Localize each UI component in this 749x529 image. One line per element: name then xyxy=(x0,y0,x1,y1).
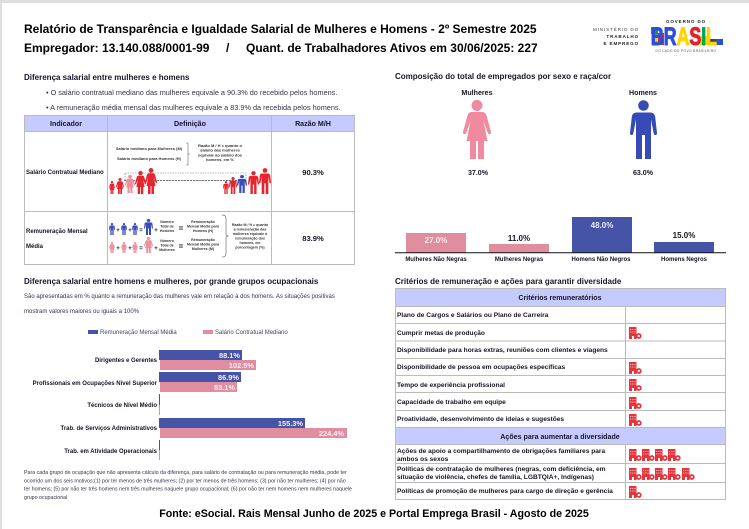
bullet text: • O salário contratual mediano das mulheres equivale a 90.3% do recebido pelos homens. xyxy=(46,88,337,97)
group: dirigentes e gerentes: Dirigentes e Gerentes xyxy=(95,358,158,364)
pictogram: homens: 63.0% xyxy=(633,169,654,177)
row: tempo de experiência: Tempo de experiência profissional xyxy=(397,382,505,389)
group: técnicos: Técnicos de Nível Médio xyxy=(87,403,157,409)
group: dirigentes e gerentes xyxy=(95,350,256,370)
footnote: Para cada grupo de ocupação que não apresenta cálculo da diferença, para salário de contratação ou para remuneração média, pode ter xyxy=(24,470,347,476)
pictogram: homens xyxy=(629,89,657,177)
diagram: remuneração média: Mensal Média para xyxy=(187,242,220,246)
footnote: ocorrido um dos seis motivos:(1) por ter menos de três mulheres; (2) por ter menos de três homens; (3) por não ter mulheres; (4) por não xyxy=(24,478,346,484)
pictogram: homens: Homens xyxy=(629,89,657,97)
column: mulheres não negras: Mulheres Não Negras xyxy=(405,257,467,263)
diagram: remuneração média: Mensal Média para xyxy=(187,224,220,228)
column: mulheres negras: 11.0% xyxy=(508,234,530,243)
column: homens não negros xyxy=(571,217,632,263)
column: mulheres não negras: 27.0% xyxy=(425,236,447,245)
group: atividade operacionais: Trab. em Atividade Operacionais xyxy=(64,449,158,455)
column chart: raça/cor xyxy=(395,217,726,263)
row: remuneração mensal média: Remuneração Mensal xyxy=(26,229,88,235)
group: serviços administrativos: 155.3% xyxy=(278,419,303,428)
title xyxy=(24,22,538,55)
diagram: remuneração média: Remuneração xyxy=(191,220,216,224)
group: atividade operacionais xyxy=(64,440,160,460)
group: profissionais: 86.9% xyxy=(218,373,239,382)
title: Quant. de Trabalhadores Ativos em 30/06/2025: 227 xyxy=(246,41,538,55)
row: proatividade: Proatividade, desenvolvimento de ideias e sugestões xyxy=(397,416,564,423)
diagram: remuneração média: Homens (H) xyxy=(193,229,214,233)
row: salário contratual mediano xyxy=(26,143,324,194)
row: ocupações específicas xyxy=(397,362,641,374)
diagram: salário mediano: Salário mediano para Homens (H) xyxy=(117,156,182,161)
logo: governo do brasil: GOVERNO DO xyxy=(666,19,706,24)
header: ações xyxy=(396,428,726,444)
table: indicadores xyxy=(24,116,354,264)
diagram: remuneração média: + xyxy=(128,228,132,234)
logo: governo do brasil: BRASIL xyxy=(651,23,717,51)
diagram: remuneração média: + xyxy=(116,246,120,252)
diagram: remuneração média: Total de xyxy=(160,244,174,248)
row: metas de produção xyxy=(397,327,641,339)
diagram: salário mediano: equivale ao salário dos xyxy=(198,152,243,157)
row: metas de produção: Cumprir metas de produção xyxy=(397,330,485,337)
diagram: remuneração média: a remuneração das xyxy=(234,228,266,232)
column: homens não negros: Homens Não Negros xyxy=(571,257,631,263)
row: plano de cargos: Plano de Cargos e Salários ou Plano de Carreira xyxy=(397,312,549,319)
logo: ministério: MINISTÉRIO DO xyxy=(593,26,639,32)
diagram: remuneração média: = xyxy=(179,224,184,233)
group: dirigentes e gerentes: 102.5% xyxy=(229,361,254,370)
diagram: remuneração média: Homens xyxy=(160,229,174,233)
row: políticas de promoção: Políticas de promoção de mulheres para cargo de direção e gerência xyxy=(397,488,613,495)
diagram: salário mediano: Razão M / H = quanto o xyxy=(198,143,243,148)
heading: critérios: Critérios de remuneração e ações para garantir diversidade xyxy=(395,277,622,286)
diagram: remuneração média: Número xyxy=(160,239,175,243)
heading: diferença salarial: Diferença salarial entre mulheres e homens xyxy=(24,73,190,82)
row: remuneração mensal média: Média xyxy=(26,244,44,250)
legend: Salário Contratual Mediano xyxy=(215,330,288,336)
footnote: ter homens; (5) por não ter três homens nem três mulheres naquele grupo ocupacional; (6) por não ter nem homens nem mulheres naquele xyxy=(24,486,352,492)
diagram: remuneração média: Mulheres xyxy=(159,248,175,252)
row: ocupações específicas: Disponibilidade de pessoa em ocupações específicas xyxy=(397,364,566,371)
diagram: salário mediano xyxy=(109,143,271,194)
title: / xyxy=(226,41,230,55)
diagram: salário mediano: Salário mediano para Mulheres (M) xyxy=(116,146,183,151)
diagram: remuneração média: Razão M / H = quanto xyxy=(232,223,269,227)
column: homens negros: Homens Negros xyxy=(661,257,708,263)
pictogram: mulheres: 37.0% xyxy=(468,169,489,177)
row: salário contratual mediano: 90.3% xyxy=(302,168,324,177)
column: homens não negros: 48.0% xyxy=(591,221,613,230)
diagram: remuneração média: + xyxy=(154,246,158,252)
row: salário contratual mediano: Salário Contratual Mediano xyxy=(26,170,104,176)
logo: governo do brasil: DO LADO DO POVO BRASILEIRO xyxy=(656,49,717,53)
diagram: salário mediano: salário das mulheres xyxy=(200,148,241,153)
logo: ministério: TRABALHO xyxy=(606,34,639,39)
header: critérios remuneratórios: Critérios remuneratórios xyxy=(518,294,602,302)
table: critérios e ações xyxy=(396,288,726,500)
row: horas extras: Disponibilidade para horas extras, reuniões com clientes e viagens xyxy=(397,347,608,354)
diagram: remuneração média: = xyxy=(139,246,143,252)
row: políticas de contratação: Políticas de contratação de mulheres (negras, com deficiência, em xyxy=(397,466,606,473)
row: trabalho em equipe xyxy=(397,397,641,409)
logo: ministério: E EMPREGO xyxy=(604,41,639,46)
column: homens negros: 15.0% xyxy=(673,231,695,240)
chart subtitle: mostram valores maiores ou iguais a 100% xyxy=(24,309,140,315)
heading: composição: Composição do total de empregados por sexo e raça/cor xyxy=(395,72,611,81)
row: tempo de experiência xyxy=(397,379,641,391)
column: homens negros xyxy=(654,231,714,263)
group: serviços administrativos xyxy=(61,418,347,438)
diagram: remuneração média: + xyxy=(116,228,120,234)
header: ações: Ações para aumentar a diversidade xyxy=(500,433,620,441)
diagram: remuneração média: Número xyxy=(160,220,175,224)
bullet text xyxy=(46,88,341,112)
column: mulheres negras: Mulheres Negras xyxy=(495,257,544,263)
column: mulheres negras xyxy=(489,234,549,263)
row: proatividade xyxy=(397,414,641,426)
diagram: salário mediano: homens, em % xyxy=(206,157,234,162)
legend: Remuneração Mensal Média xyxy=(100,330,177,336)
footnote: grupo ocupacional xyxy=(24,495,67,501)
footnote xyxy=(24,470,352,501)
chart subtitle: São apresentadas em % quanto a remuneração das mulheres vale em relação à dos homens. As situações positivas xyxy=(24,294,335,300)
table header: Indicador xyxy=(50,120,82,128)
source: Fonte: eSocial. Rais Mensal Junho de 2025 e Portal Emprega Brasil - Agosto de 2025 xyxy=(159,508,589,520)
table header: Razão M/H xyxy=(295,120,331,128)
group: profissionais: 83.1% xyxy=(214,383,235,392)
title: Empregador: 13.140.088/0001-99 xyxy=(24,41,210,55)
table header xyxy=(24,116,354,132)
row: remuneração mensal média: 83.9% xyxy=(302,234,324,243)
diagram: remuneração média xyxy=(109,215,269,257)
group: profissionais xyxy=(33,372,241,392)
row: políticas de contratação: situação de violência, chefes de família, LGBTQIA+, Indígenas) xyxy=(397,474,594,481)
logo: ministério xyxy=(593,26,639,46)
diagram: remuneração média: homens, em xyxy=(240,241,260,245)
row: compartilhamento de obrigações xyxy=(397,448,680,463)
table header: Definição xyxy=(174,120,207,128)
row: compartilhamento de obrigações: ambos os sexos xyxy=(397,456,449,463)
diagram: remuneração média: Remuneração xyxy=(191,238,216,242)
group: serviços administrativos: 224.4% xyxy=(319,429,344,438)
group: serviços administrativos: Trab. de Serviços Administrativos xyxy=(61,426,158,432)
title: Relatório de Transparência e Igualdade Salarial de Mulheres e Homens - 2º Semestre 2025 xyxy=(24,22,537,36)
diagram: remuneração média: Mulheres (M) xyxy=(192,247,215,251)
row: compartilhamento de obrigações: Ações de apoio a compartilhamento de obrigações familiares para xyxy=(397,448,605,455)
diagram: remuneração média: porcentagem (%) xyxy=(235,246,265,250)
row: remuneração mensal média xyxy=(26,215,324,257)
group: profissionais: Profissionais em Ocupações Nível Superior xyxy=(33,381,158,387)
legend xyxy=(88,330,288,336)
diagram: remuneração média: Total de xyxy=(160,224,174,228)
group: dirigentes e gerentes: 88.1% xyxy=(219,351,240,360)
diagram: remuneração média: = xyxy=(139,228,143,234)
group: técnicos xyxy=(87,394,160,415)
diagram: remuneração média: = xyxy=(179,242,184,251)
column: mulheres não negras xyxy=(405,233,467,263)
pictogram: mulheres xyxy=(461,89,493,177)
chart subtitle xyxy=(24,294,335,315)
row: políticas de contratação xyxy=(397,466,694,481)
bullet text: • A remuneração média mensal das mulheres equivale a 83.9% da recebida pelos homens. xyxy=(46,103,341,112)
row: políticas de promoção xyxy=(397,486,641,498)
bar chart: grupos ocupacionais xyxy=(33,350,347,460)
pictogram: mulheres: Mulheres xyxy=(461,89,493,97)
diagram: remuneração média: + xyxy=(128,246,132,252)
header: critérios remuneratórios xyxy=(396,288,726,306)
heading: grupos ocupacionais: Diferença salarial entre homens e mulheres, por grande grupos ocupacionais xyxy=(24,277,319,286)
diagram: remuneração média: remuneração dos xyxy=(235,236,265,240)
diagram: remuneração média: mulheres equivale à xyxy=(233,232,267,236)
row: trabalho em equipe: Capacidade de trabalho em equipe xyxy=(397,399,506,406)
diagram: remuneração média: + xyxy=(154,228,158,234)
